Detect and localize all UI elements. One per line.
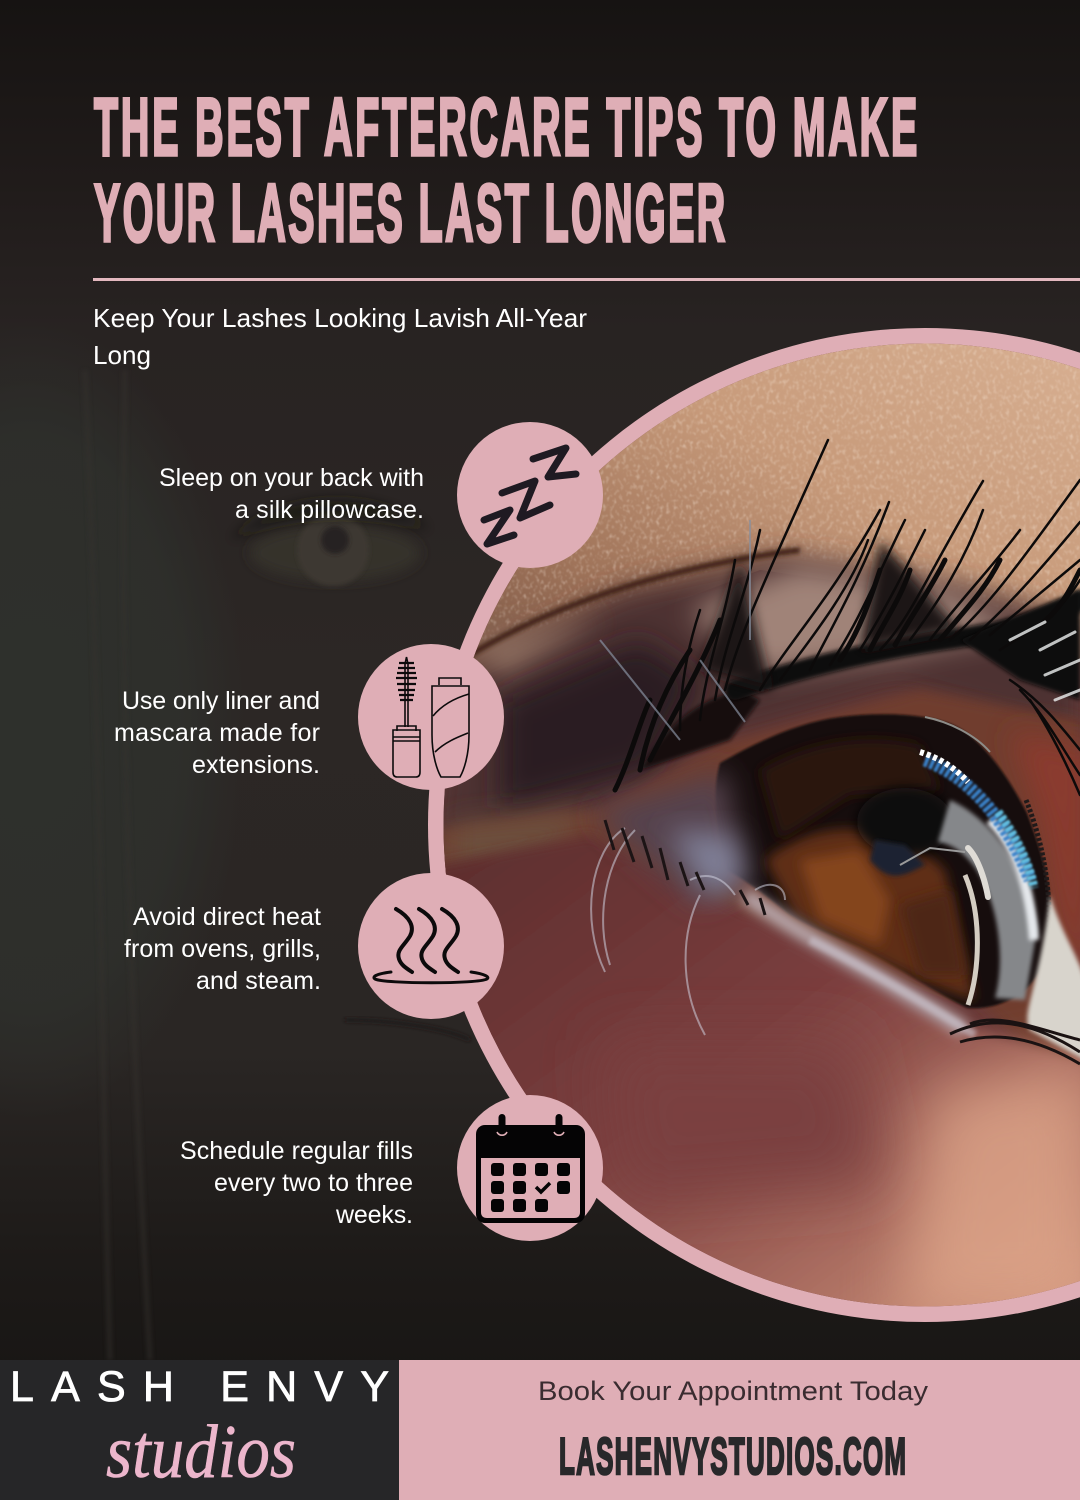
step 3 circle with steam icon bbox=[358, 873, 504, 1019]
upper skin bbox=[474, 344, 1080, 665]
step 1 text: sleep: Sleep on your back with bbox=[159, 464, 424, 492]
subtitle: Keep Your Lashes Looking Lavish All-Year bbox=[93, 303, 587, 333]
step 2 text: liner and mascara: Use only liner and bbox=[122, 687, 320, 715]
footer call-to-action panel: LASHENVYSTUDIOS.COM bbox=[559, 1427, 906, 1485]
lower lash line bbox=[745, 895, 965, 1030]
step 4 circle with calendar icon bbox=[457, 1095, 603, 1241]
step 4 text: fills: Schedule regular fills bbox=[180, 1137, 413, 1165]
title bbox=[94, 81, 917, 259]
footer call-to-action panel bbox=[399, 1360, 1080, 1500]
eyeball bbox=[716, 714, 1050, 1008]
large circle ring bbox=[428, 328, 1080, 1322]
subtitle: Long bbox=[93, 340, 151, 370]
step 4 text: fills bbox=[180, 1137, 413, 1229]
step 3 text: heat: and steam. bbox=[196, 967, 321, 995]
step 4 text: fills: weeks. bbox=[335, 1201, 413, 1229]
title: YOUR LASHES LAST LONGER bbox=[94, 167, 725, 259]
horizontal divider under title bbox=[93, 278, 1080, 281]
step 2 text: liner and mascara: mascara made for bbox=[114, 719, 320, 747]
step 1 text: sleep bbox=[159, 464, 424, 524]
lower skin bbox=[445, 836, 1080, 1306]
step 3 text: heat: Avoid direct heat bbox=[133, 903, 321, 931]
footer logo panel bbox=[0, 1360, 399, 1500]
step 2 circle with mascara icon bbox=[358, 644, 504, 790]
step 1 circle with sleep icon bbox=[457, 422, 603, 568]
lower outer lashes bbox=[950, 1020, 1080, 1064]
eye close-up photo bbox=[444, 344, 1080, 1306]
step 4 text: fills: every two to three bbox=[214, 1169, 413, 1197]
step 2 text: liner and mascara: extensions. bbox=[192, 751, 320, 779]
footer logo panel: studios bbox=[106, 1410, 296, 1494]
blue reflection bbox=[925, 760, 1030, 880]
footer logo panel: LASH ENVY bbox=[10, 1363, 389, 1411]
title: THE BEST AFTERCARE TIPS TO MAKE bbox=[94, 81, 917, 173]
upper lashes bbox=[615, 440, 1080, 795]
footer call-to-action panel: Book Your Appointment Today bbox=[538, 1376, 929, 1406]
subtitle bbox=[93, 303, 587, 370]
lid above eye bbox=[444, 688, 1080, 1040]
inner corner haze bbox=[592, 770, 745, 905]
step 2 text: liner and mascara bbox=[114, 687, 320, 779]
step 3 text: heat bbox=[124, 903, 321, 995]
silver corneal reflection bbox=[938, 800, 1037, 1000]
sclera bbox=[1027, 895, 1080, 1060]
step 3 text: heat: from ovens, grills, bbox=[124, 935, 321, 963]
step 1 text: sleep: a silk pillowcase. bbox=[235, 496, 424, 524]
eyelid bbox=[430, 555, 1080, 850]
